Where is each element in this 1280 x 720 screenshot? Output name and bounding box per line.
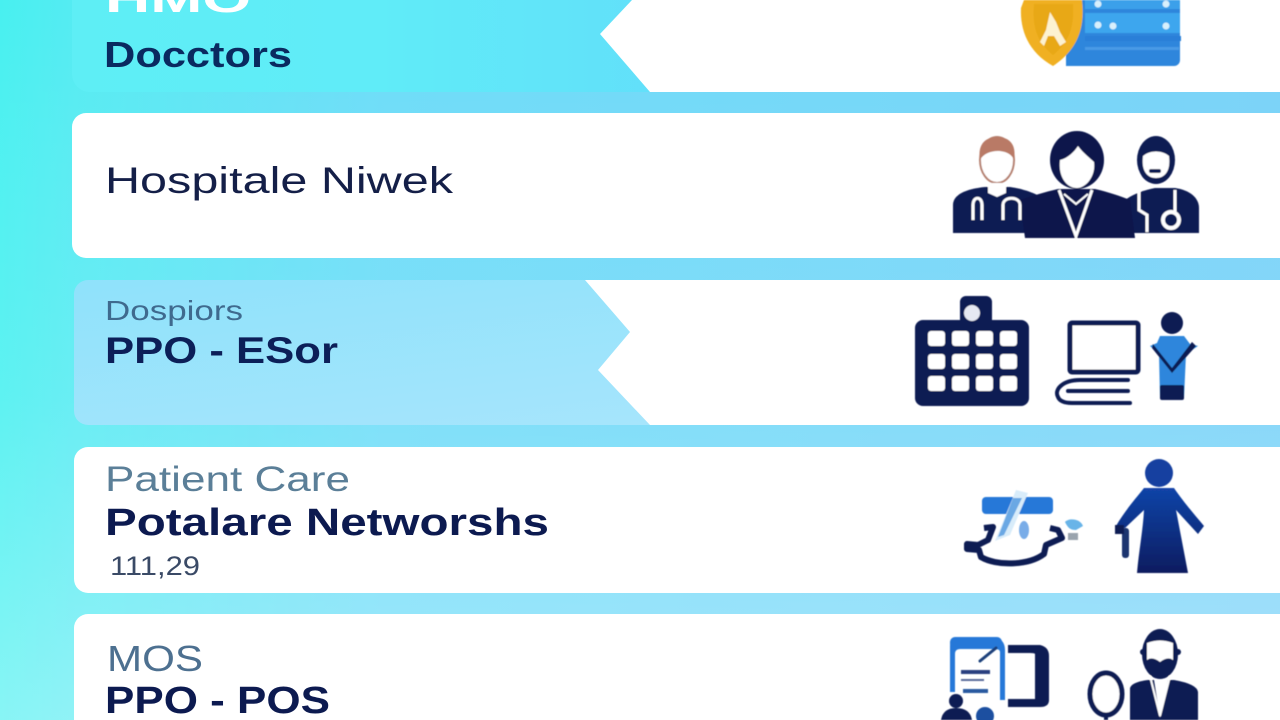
chevron: white area row 1 bbox=[600, 0, 1280, 92]
heading: Docctors: Docctors bbox=[104, 34, 292, 75]
panel: MOS PPO POS bbox=[74, 614, 1280, 720]
icon: three doctors bbox=[953, 131, 1199, 238]
icon: standing person bbox=[1150, 312, 1198, 400]
heading: Potalare Networshs: Potalare Networshs bbox=[105, 502, 549, 544]
panel: PPO ESor bbox=[74, 280, 1280, 425]
icon: computer and book bbox=[1057, 323, 1138, 403]
chevron: white area row 3 bbox=[585, 280, 1280, 425]
icon: hospital building bbox=[915, 296, 1029, 406]
icon: documents and people bbox=[941, 637, 1049, 720]
heading: Hospitale Niwek: Hospitale Niwek bbox=[105, 160, 454, 201]
panel: HMO doctors bbox=[72, 0, 1280, 92]
panel: patient care networks bbox=[74, 447, 1280, 593]
heading: PPO - ESor: PPO - ESor bbox=[105, 330, 338, 371]
label: MOS: MOS bbox=[107, 638, 203, 679]
icon: woman and man with beard bbox=[1090, 629, 1198, 720]
label: Patient Care: Patient Care bbox=[105, 460, 350, 499]
icon: person with cane bbox=[1115, 459, 1204, 573]
label: Dospiors: Dospiors bbox=[105, 295, 243, 326]
icon: gear and tool bbox=[967, 490, 1083, 563]
value: 111,29: 111,29 bbox=[110, 551, 200, 581]
panel: hospital network bbox=[72, 113, 1280, 258]
icon: shield and server bbox=[1021, 0, 1181, 66]
